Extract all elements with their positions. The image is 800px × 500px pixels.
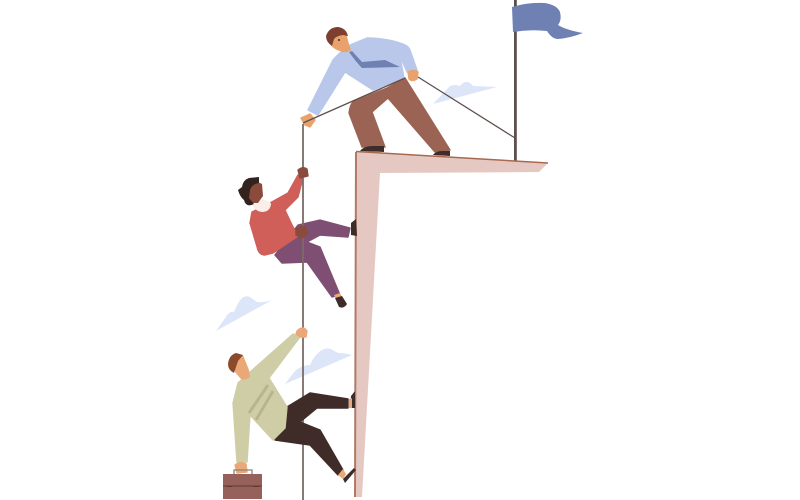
figure: man climbing with briefcase xyxy=(223,328,356,499)
tie xyxy=(349,51,400,68)
woman's hands xyxy=(296,168,308,238)
briefcase strap xyxy=(223,485,262,487)
briefcase xyxy=(223,474,262,499)
face xyxy=(247,182,263,203)
sweater xyxy=(233,334,300,462)
figure: woman climbing xyxy=(238,175,357,308)
eye xyxy=(338,39,340,41)
cliff top edge xyxy=(356,152,548,163)
cloud: middle left xyxy=(216,296,272,331)
flag pole xyxy=(514,0,517,161)
hands xyxy=(301,70,418,127)
cloud: lower xyxy=(285,348,352,384)
ankles xyxy=(338,398,352,479)
shirt xyxy=(308,38,417,115)
collar xyxy=(252,199,271,212)
hair xyxy=(238,177,259,205)
ankle xyxy=(334,293,342,299)
trousers xyxy=(349,78,450,152)
flag cloth xyxy=(512,3,583,39)
figure: top man pulling rope xyxy=(301,27,450,156)
rope: held by top man xyxy=(303,78,405,123)
flag xyxy=(512,0,583,161)
shoes xyxy=(343,391,356,483)
briefcase handle xyxy=(234,470,252,474)
cliff face xyxy=(355,152,548,497)
cloud: top right xyxy=(433,82,497,104)
cliff xyxy=(355,152,548,497)
hair xyxy=(326,27,348,46)
face xyxy=(233,355,250,380)
briefcase clasps xyxy=(227,486,259,487)
hands xyxy=(235,328,307,473)
cliff left edge xyxy=(355,152,356,497)
hair xyxy=(228,353,243,373)
rope: vertical xyxy=(302,124,304,500)
rope: anchor to flag pole xyxy=(418,77,515,138)
shoes xyxy=(335,219,357,308)
shoes xyxy=(360,146,450,156)
trousers xyxy=(275,220,350,297)
neck and face xyxy=(330,33,351,52)
sweater stripes xyxy=(249,385,273,420)
sweater xyxy=(250,175,303,255)
trousers xyxy=(275,393,348,475)
